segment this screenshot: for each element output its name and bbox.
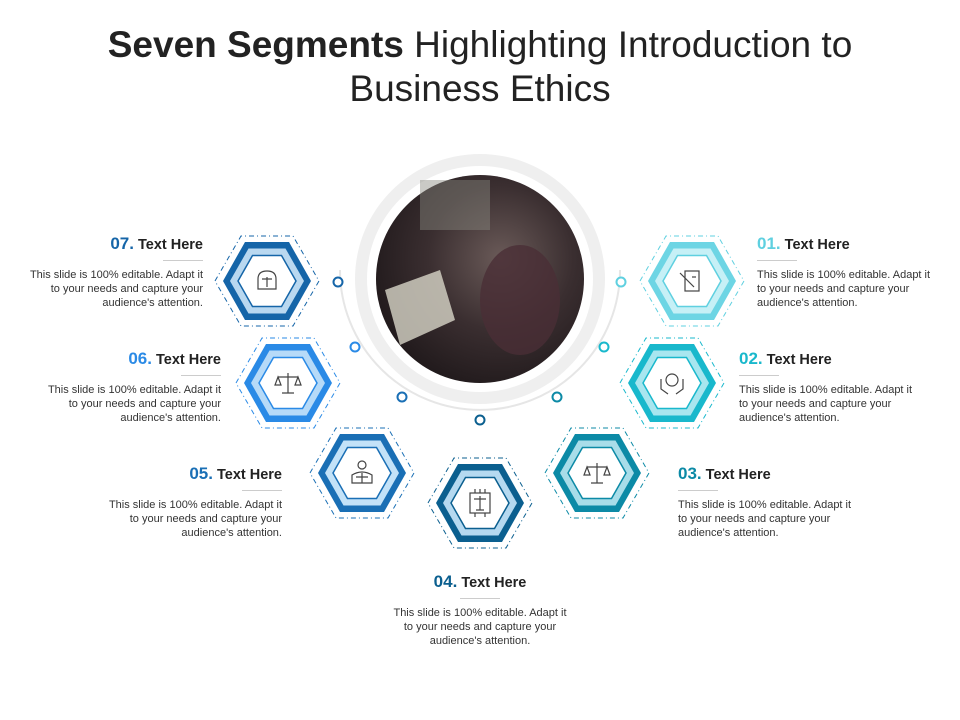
text 07 [30, 234, 203, 309]
hexagon 07 [215, 236, 319, 326]
title: Business Ethics [349, 68, 611, 109]
text: 06. Text Here [128, 349, 221, 368]
text: This slide is 100% editable. Adapt it to your needs and capture your audience's attention. [739, 384, 912, 424]
text: This slide is 100% editable. Adapt it to your needs and capture your audience's attention. [393, 607, 567, 647]
hexagon 01 [640, 236, 744, 326]
text: 07. Text Here [110, 234, 203, 253]
text 04 [393, 572, 567, 647]
text 03 [678, 464, 851, 539]
hexagon 05 [310, 428, 414, 518]
hexagon 02 [620, 338, 724, 428]
title [108, 24, 852, 109]
text: 03. Text Here [678, 464, 771, 483]
text: This slide is 100% editable. Adapt it to your needs and capture your audience's attention. [109, 499, 282, 539]
text: 05. Text Here [189, 464, 282, 483]
text 02 [739, 349, 912, 424]
text: This slide is 100% editable. Adapt it to your needs and capture your audience's attention. [30, 269, 203, 309]
text: This slide is 100% editable. Adapt it to your needs and capture your audience's attention. [678, 499, 851, 539]
text 05 [109, 464, 282, 539]
hexagon 06 [236, 338, 340, 428]
text: 02. Text Here [739, 349, 832, 368]
text 06 [48, 349, 221, 424]
text: 04. Text Here [434, 572, 526, 591]
dots [334, 278, 626, 424]
text: This slide is 100% editable. Adapt it to your needs and capture your audience's attention. [757, 269, 930, 309]
text: This slide is 100% editable. Adapt it to your needs and capture your audience's attention. [48, 384, 221, 424]
title: Seven Segments Highlighting Introduction to [108, 24, 852, 65]
hexagon 04 [428, 458, 532, 548]
hexagon 03 [545, 428, 649, 518]
arc [340, 270, 620, 410]
text 01 [757, 234, 930, 309]
text: 01. Text Here [757, 234, 850, 253]
center circle photo [355, 154, 605, 404]
